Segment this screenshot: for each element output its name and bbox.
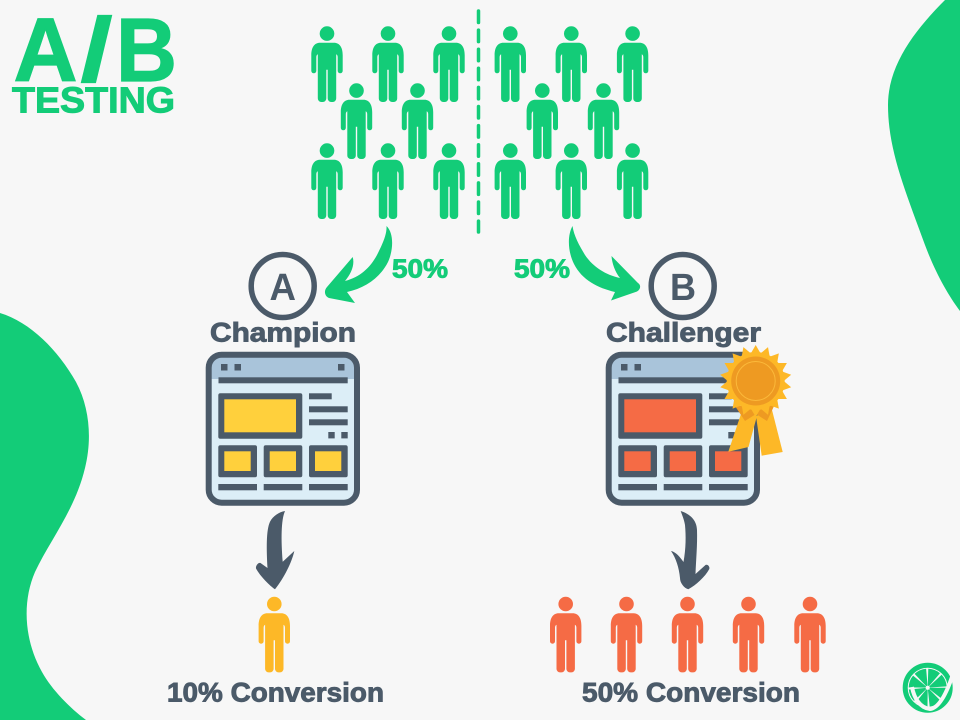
arrow: crowd to B [569,226,640,300]
title [12,1,177,120]
title: / [80,1,112,101]
arrow: challenger to conversion [671,511,709,589]
webpage: champion [209,355,357,503]
icon: lime logo [905,665,954,710]
decorative blob: top right [888,0,960,311]
crowd: group A [311,26,465,219]
title: B [116,1,177,101]
crowd: group B [495,26,648,219]
title: TESTING [12,80,175,120]
label: 50% left: 50% [392,254,448,284]
heading: Champion: Champion [210,318,356,348]
label: 50% right: 50% [514,254,570,284]
heading: Challenger: Challenger [606,318,762,348]
arrow: crowd to A [325,226,392,303]
badge A: A [270,267,296,309]
label: 10% Conversion: 10% Conversion [167,678,384,708]
arrow: champion to conversion [256,511,294,589]
badge B [651,254,714,318]
dashed divider [477,11,480,232]
title: A [14,1,78,101]
people: five conversions [550,597,826,672]
label: 50% Conversion: 50% Conversion [582,678,800,708]
webpage: challenger [609,355,757,503]
icon: award ribbon [720,333,803,456]
badge A [251,254,314,318]
badge B: B [670,267,696,309]
person: one conversion [259,597,290,672]
decorative blob: bottom left [0,313,89,720]
